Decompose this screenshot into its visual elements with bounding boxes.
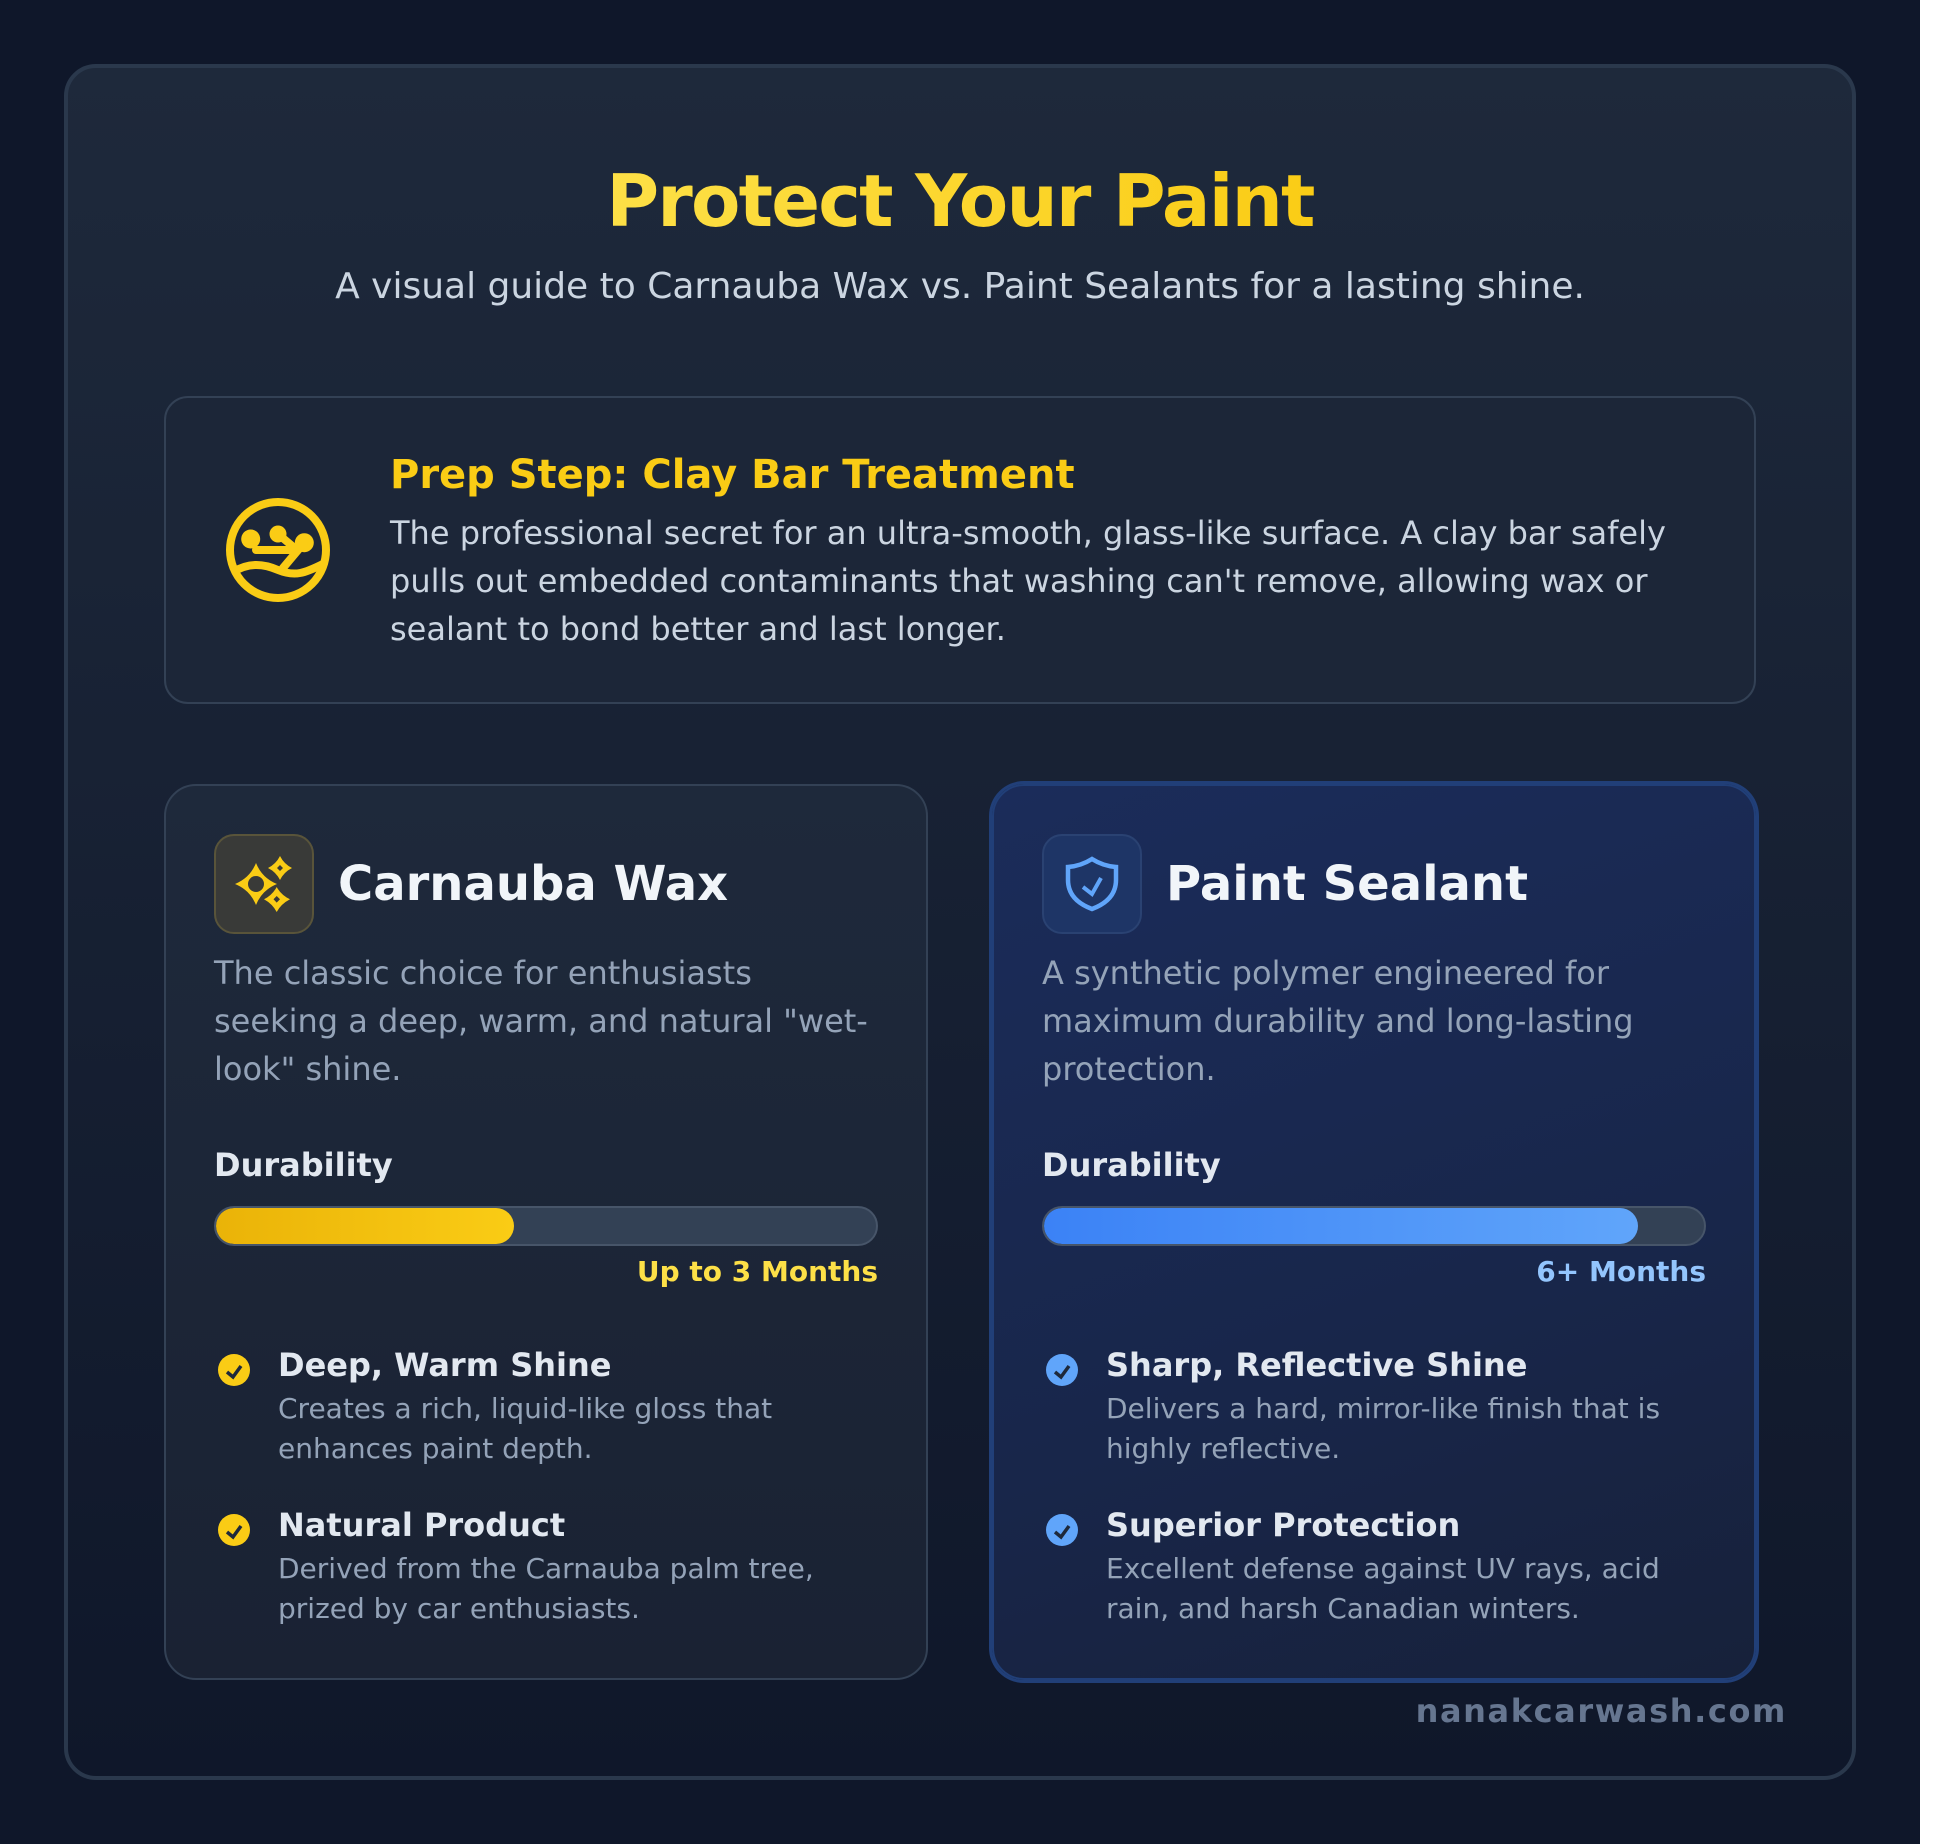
check icon <box>1046 1514 1078 1546</box>
prep heading: Prep Step: Clay Bar Treatment <box>390 452 1075 498</box>
feature title: Superior Protection <box>1106 1506 1460 1544</box>
icon: sparkles <box>214 834 314 934</box>
feature text: Excellent defense against UV rays, acid rain, and harsh Canadian winters. <box>1106 1552 1660 1625</box>
feature text: Delivers a hard, mirror-like finish that is highly reflective. <box>1106 1392 1660 1465</box>
check icon <box>1046 1354 1078 1386</box>
sealant durability label: Durability <box>1042 1146 1221 1184</box>
sealant durability bar <box>1042 1206 1706 1246</box>
feature title: Natural Product <box>278 1506 565 1544</box>
feature text: Derived from the Carnauba palm tree, prized by car enthusiasts. <box>278 1552 814 1625</box>
prep text: The professional secret for an ultra-smooth, glass-like surface. A clay bar safely pulls out embedded contaminants that washing can't remove, allowing wax or sealant to bond better and last longer. <box>390 514 1666 648</box>
watermark: nanakcarwash.com <box>1416 1692 1787 1730</box>
icon: shield <box>1042 834 1142 934</box>
feature text: Creates a rich, liquid-like gloss that enhances paint depth. <box>278 1392 772 1465</box>
feature title: Sharp, Reflective Shine <box>1106 1346 1527 1384</box>
subtitle: A visual guide to Carnauba Wax vs. Paint Sealants for a lasting shine. <box>335 266 1585 307</box>
carnauba durability value: Up to 3 Months <box>637 1255 878 1288</box>
sealant title: Paint Sealant <box>1166 856 1528 912</box>
panel: paint sealant <box>992 784 1756 1680</box>
title: Protect Your Paint <box>606 159 1314 243</box>
sealant durability value: 6+ Months <box>1536 1255 1706 1288</box>
panel: carnauba wax <box>164 784 928 1680</box>
panel: prep step <box>164 396 1756 704</box>
carnauba description: The classic choice for enthusiasts seeking a deep, warm, and natural "wet- look" shine. <box>214 954 868 1088</box>
check icon <box>218 1354 250 1386</box>
carnauba title: Carnauba Wax <box>338 856 728 912</box>
carnauba durability bar <box>214 1206 878 1246</box>
feature title: Deep, Warm Shine <box>278 1346 611 1384</box>
carnauba durability label: Durability <box>214 1146 393 1184</box>
sealant description: A synthetic polymer engineered for maximum durability and long-lasting protection. <box>1042 954 1634 1088</box>
icon: clay bar <box>226 498 330 602</box>
check icon <box>218 1514 250 1546</box>
